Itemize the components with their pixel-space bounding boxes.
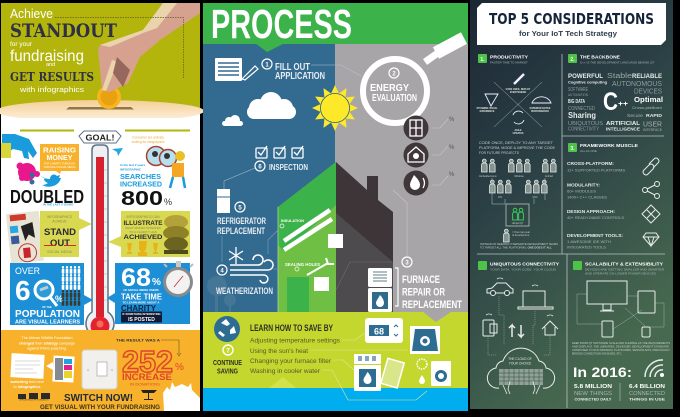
icons: social dots bbox=[30, 172, 34, 184]
step 6: inspection: INSPECTION bbox=[269, 163, 308, 172]
heading: achieve standout: fundraising bbox=[10, 48, 84, 65]
stat: 6.4 billion: THINGS IN USE bbox=[629, 398, 666, 402]
icon: small cloud bbox=[222, 115, 243, 126]
header pointer bbox=[255, 43, 285, 52]
section 3: framework muscle: 3. bbox=[570, 146, 575, 152]
sealing holes label and caulk gun: SEALING HOLES bbox=[285, 262, 320, 267]
icon: blue hand bbox=[1, 134, 37, 159]
panel: 60% visual learners: POPULATION bbox=[15, 309, 80, 320]
word cloud: Sharing bbox=[568, 111, 596, 120]
pictogram: developers by platform bbox=[479, 159, 558, 250]
heading: achieve standout: STANDOUT bbox=[10, 20, 117, 42]
stat: searches increased 800%: 800 bbox=[121, 188, 163, 210]
pictogram: developers by platform: of development bbox=[512, 234, 529, 237]
illustration: light switch bbox=[82, 350, 117, 389]
section 3: framework muscle: DEVELOPMENT TOOLS: bbox=[567, 233, 623, 238]
word cloud: UBIQUITOUS bbox=[568, 121, 603, 127]
section 3: framework muscle: ALL-IN-ONE bbox=[580, 149, 597, 153]
icon: cycle arrows bbox=[513, 111, 524, 124]
step 1: fill out application bbox=[215, 58, 325, 82]
icon: smartphone bbox=[602, 321, 613, 337]
paragraph: AND DISPLAYS, THE LIBRARIES, DESIGNER, DEVELOPMENT STANDARD bbox=[572, 344, 669, 348]
step 5: refrigerator replacement: REFRIGERATOR bbox=[217, 216, 266, 226]
section 3: framework muscle: INTEGRATED TOOLS bbox=[567, 246, 607, 250]
icon: window bbox=[404, 116, 428, 140]
header background bbox=[203, 3, 468, 44]
step 7: continue saving: 7 bbox=[226, 348, 230, 354]
stat: 5.8 million bbox=[574, 384, 612, 402]
step 7: continue saving: CONTINUE bbox=[213, 358, 242, 367]
section 5: scalability and extensibility: AND OPERATE ON LOWER POWER DEVICES bbox=[585, 272, 656, 276]
call to action: switch now: GET VISUAL WITH YOUR FUNDRAISING bbox=[40, 405, 160, 411]
heading: achieve standout: for your bbox=[10, 41, 33, 48]
caption: switching from text to infographics: to infographics bbox=[13, 385, 41, 389]
text: the result was: THE RESULT WAS A bbox=[116, 338, 160, 342]
goal sign: GOAL! bbox=[86, 132, 115, 142]
step 6: inspection: 6 bbox=[258, 164, 262, 170]
word cloud: RELIABLE bbox=[632, 73, 663, 80]
word cloud: Cross-platform bbox=[632, 105, 663, 110]
step 7: continue saving: SAVING bbox=[217, 366, 238, 376]
dark section of house bbox=[336, 162, 393, 312]
stat: doubled: IN THE LAST 3 YEARS bbox=[43, 202, 73, 206]
callout: stand out: STAND bbox=[44, 227, 77, 237]
illustration: person with binoculars bbox=[146, 146, 185, 188]
section 1: productivity: EXPERIENCE bbox=[480, 111, 495, 113]
icon: wifi signal bbox=[645, 360, 664, 377]
section 1: productivity: CODE ONCE, DEPLOY bbox=[506, 89, 531, 91]
title: PROCESS bbox=[211, 1, 352, 47]
pictogram: developers by platform: = One man year bbox=[512, 231, 530, 234]
word cloud: C bbox=[603, 88, 618, 116]
panel: 68% take time: OF SOCIAL MEDIA USERS bbox=[123, 288, 159, 292]
stat: 252% increase: % bbox=[175, 362, 184, 373]
text: code once deploy: FOR FUTURE PROJECTS bbox=[479, 151, 520, 155]
icon: thermostat bbox=[365, 318, 403, 343]
step 5: refrigerator replacement: REPLACEMENT bbox=[217, 226, 265, 236]
windows bbox=[314, 234, 343, 291]
icon: share nodes bbox=[642, 182, 660, 198]
stat: 6.4 billion: 6.4 BILLION bbox=[629, 384, 665, 390]
paragraph: DEEP FROM QT SOFTWARE SCALE AND FLEXIBLE AS THE REQUIREMENTS bbox=[572, 341, 670, 345]
icon: large cloud bbox=[247, 92, 296, 119]
panel: 60% visual learners: 6 bbox=[15, 275, 31, 306]
word cloud: POWERFUL bbox=[568, 73, 603, 80]
word cloud: DEVICES bbox=[634, 86, 662, 96]
step 1: fill out application: 1 bbox=[265, 62, 269, 68]
section 3: framework muscle: FRAMEWORK MUSCLE bbox=[580, 143, 638, 148]
stat: 252% increase: IN DONATIONS bbox=[130, 382, 161, 386]
panel: fundraising infographic bbox=[0, 3, 204, 411]
stat: 252% increase bbox=[122, 344, 184, 386]
callout: illustrate achieved bbox=[108, 211, 190, 257]
callout: stand out: OUT bbox=[50, 238, 71, 248]
section 3: framework muscle: 12+ SUPPORTED PLATFORMS bbox=[567, 168, 626, 172]
section 1: productivity: UPDATES bbox=[513, 132, 524, 135]
stat: searches increased 800%: INFOGRAPHIC bbox=[120, 168, 142, 172]
savings list: Changing your furnace filter bbox=[250, 359, 331, 365]
icon: thermostat: 68 bbox=[374, 326, 384, 336]
call to action: switch now: SWITCH NOW! bbox=[64, 392, 133, 404]
step 2: energy evaluation magnifier bbox=[363, 36, 464, 123]
stat: searches increased 800%: In the last 2 years bbox=[120, 163, 146, 167]
paragraph bbox=[572, 341, 670, 356]
bottom blue band bbox=[203, 388, 468, 411]
callout: raising money: THROUGH SOCIAL MEDIA bbox=[43, 165, 76, 169]
step 3: furnace repair or replacement: REPLACEMENT bbox=[402, 299, 462, 311]
sealing holes label and caulk gun bbox=[285, 258, 334, 275]
illustration: rhino bbox=[163, 382, 200, 411]
percent labels bbox=[432, 117, 455, 185]
icon: pink splat bbox=[16, 162, 40, 181]
panel: 60% visual learners bbox=[10, 263, 93, 326]
stat: 5.8 million: 5.8 MILLION bbox=[574, 384, 612, 390]
stat: 5.8 million: CONNECTED DAILY bbox=[574, 398, 612, 402]
section 1: productivity: FASTER TIME TO MARKET bbox=[490, 60, 528, 64]
icon: funnel bbox=[485, 94, 498, 106]
section 3: framework muscle: DESIGN APPROACH: bbox=[567, 209, 615, 214]
section 2: the backbone bbox=[568, 54, 654, 64]
text: African Wildlife Foundation: against Rhino poaching, bbox=[27, 346, 67, 350]
icon: tape measure bbox=[163, 215, 189, 254]
caption: elephants: AFRICAN WILDLIFE FOUNDATION bbox=[20, 398, 49, 402]
connector bbox=[336, 262, 392, 290]
section 1: productivity: PERFORMANCE bbox=[531, 110, 549, 113]
savings list: Using the sun's heat bbox=[250, 349, 308, 355]
icon: paper plane bbox=[112, 148, 123, 156]
illustration: hand dropping coin bbox=[98, 3, 200, 92]
step 4: weatherization bbox=[216, 247, 273, 296]
decorative goal lines bbox=[20, 130, 190, 132]
connector bbox=[393, 190, 407, 256]
panel: 68% take time: IS POSTED bbox=[128, 317, 155, 323]
callout: stand out: ACHIEVE bbox=[52, 220, 68, 224]
icon: water and flame bbox=[404, 170, 428, 196]
word cloud: CONNECTED bbox=[568, 106, 595, 112]
callout: raising money: MONEY bbox=[46, 153, 72, 162]
stat: searches increased 800% bbox=[120, 163, 172, 210]
icon: magic wand bbox=[514, 74, 524, 84]
icon: house recycle bbox=[404, 142, 428, 168]
icon: furnace bbox=[354, 354, 381, 391]
step 3: furnace repair or replacement: FURNACE bbox=[402, 274, 440, 286]
panel: 68% take time: IF SOMETHING INTERESTING bbox=[122, 312, 161, 316]
panel: 60% visual learners: OF THE bbox=[42, 305, 52, 309]
connectors bbox=[222, 230, 284, 269]
word cloud: INTELLIGENCE bbox=[606, 126, 640, 132]
text: code once deploy: CODE ONCE, DEPLOY TO ANY TARGET bbox=[479, 141, 553, 145]
savings list: Washing in cooler water bbox=[250, 369, 320, 375]
stat: 252% increase: 252 bbox=[122, 344, 173, 379]
section 3: framework muscle: 1 AWESOME IDE WITH bbox=[567, 240, 612, 244]
step 1: fill out application: FILL OUT bbox=[275, 62, 310, 73]
pictogram: developers by platform: INSTEAD OF NEEDING 5 SEPARATE DEVELOPMENT TEAMS bbox=[480, 242, 558, 246]
word cloud: CONNECTIVITY bbox=[568, 126, 600, 132]
collection plate bbox=[0, 100, 204, 126]
callout: raising money: RAISING bbox=[43, 146, 76, 154]
word cloud: BIG DATA bbox=[568, 99, 585, 105]
callout: illustrate achieved: ACHIEVED bbox=[124, 234, 163, 241]
section 1: productivity bbox=[476, 54, 551, 135]
dividers bbox=[477, 54, 665, 408]
heading: achieve standout: GET RESULTS bbox=[10, 69, 94, 84]
icons: trophies bbox=[127, 241, 158, 256]
text: code once deploy: PLATFORM, MODE & IMPROVE THE CODE bbox=[479, 146, 556, 150]
stat: 6.4 billion: CONNECTED bbox=[629, 391, 665, 397]
text: African Wildlife Foundation: The African Wildlife Foundation bbox=[21, 336, 73, 340]
icon: monitor bbox=[587, 281, 627, 311]
icon: puzzle diamond bbox=[642, 205, 660, 223]
section 3: framework muscle: 1400+ C++ CLASSES bbox=[567, 196, 608, 200]
section 5: scalability and extensibility: DEVICES ARE GETTING SMALLER AND SMARTER bbox=[585, 268, 665, 272]
panel: 60% visual learners: ARE VISUAL LEARNERS bbox=[15, 320, 80, 326]
word cloud: ++ bbox=[618, 101, 628, 108]
step 7: continue saving bbox=[213, 316, 242, 376]
icon: air vent bbox=[410, 326, 440, 354]
section 1: productivity: PRODUCTIVITY bbox=[490, 54, 528, 60]
stat: searches increased 800%: % bbox=[164, 197, 172, 207]
icon: car bbox=[487, 278, 513, 296]
stat: 6.4 billion bbox=[629, 384, 666, 402]
goal sign bbox=[79, 131, 121, 143]
icon: cloud with keyboard bbox=[487, 348, 555, 394]
heading: achieve standout: with infographics bbox=[19, 85, 84, 94]
step 2: energy evaluation magnifier: ENERGY bbox=[370, 83, 409, 94]
icon: sun bbox=[312, 85, 358, 131]
dotted arrow bbox=[55, 18, 184, 79]
call to action: switch now bbox=[40, 392, 160, 411]
word cloud: USER bbox=[643, 122, 662, 128]
connector bbox=[311, 65, 361, 76]
section 3: framework muscle: 40+ READY-MADE CONTROLS bbox=[567, 216, 625, 220]
section 4: ubiquitous connectivity bbox=[478, 261, 559, 394]
section 2: the backbone: 2. bbox=[570, 57, 575, 63]
section 5: scalability and extensibility bbox=[572, 261, 670, 402]
icon: gem bbox=[643, 233, 659, 246]
pictogram: developers by platform: Ubiquiti QT bbox=[512, 222, 524, 225]
text: African Wildlife Foundation: changed their strategy campaign bbox=[19, 342, 75, 346]
right grey section bbox=[335, 44, 468, 312]
section 1: productivity: 1. bbox=[480, 57, 485, 63]
icon: stopwatch bbox=[163, 261, 193, 297]
step 4: weatherization: 4 bbox=[220, 268, 224, 274]
stat: doubled: DOUBLED bbox=[10, 187, 84, 207]
step 1: fill out application: APPLICATION bbox=[275, 71, 325, 82]
word cloud: AUTOMATION bbox=[568, 92, 588, 97]
pictogram: developers by platform: Windows bbox=[514, 176, 525, 178]
insulation strips: INSULATION bbox=[281, 219, 304, 223]
step 2: energy evaluation magnifier: 2 bbox=[392, 72, 396, 78]
title box: for Your IoT Tech Strategy bbox=[519, 29, 618, 38]
image: text document to infographic bbox=[10, 353, 75, 383]
heading: achieve standout: and bbox=[46, 62, 55, 68]
step 3: furnace repair or replacement: 3 bbox=[405, 260, 409, 266]
section 4: ubiquitous connectivity: UNIQUITOUS CONNECTIVITY bbox=[490, 262, 559, 266]
icon: watch bbox=[642, 327, 650, 337]
word cloud: SOFTWARE bbox=[568, 87, 588, 93]
divider bbox=[619, 383, 621, 401]
stat: searches increased 800%: SEARCHES bbox=[120, 172, 161, 181]
word cloud: RAPID bbox=[646, 113, 663, 118]
step 4: weatherization: WEATHERIZATION bbox=[216, 286, 273, 296]
illustration: social card bbox=[5, 210, 45, 265]
panel: process infographic bbox=[203, 1, 468, 411]
lime pointer bbox=[269, 377, 296, 388]
insulation strips bbox=[280, 210, 332, 250]
icon: gauge bbox=[532, 97, 551, 103]
stat heading: in 2016: In 2016: bbox=[573, 364, 632, 380]
note: consumers looking for infographics bbox=[132, 136, 165, 144]
caption: switching from text to infographics bbox=[10, 380, 45, 389]
caption: switching from text to infographics: switching from text bbox=[10, 380, 45, 384]
callout: illustrate achieved: WHAT MONEY DONATED bbox=[125, 226, 162, 230]
percent labels: % bbox=[449, 145, 455, 151]
panel: 68% take time: CHARITY bbox=[121, 304, 157, 313]
text: code once deploy bbox=[479, 141, 556, 155]
step 3: furnace repair or replacement bbox=[368, 257, 462, 312]
savings list: LEARN HOW TO SAVE BY bbox=[250, 323, 333, 334]
icons: elephants bbox=[18, 393, 50, 399]
paragraph: BRIDGED CONNECTIONS AND BUSES, ETC. bbox=[572, 352, 622, 356]
pictogram: developers by platform: TO TARGET ALL THE PLATFORMS, ONE DOES IT ALL bbox=[480, 246, 552, 250]
icon: cloud with keyboard: YOUR CHOICE bbox=[509, 362, 531, 366]
heading: achieve standout: Achieve bbox=[10, 7, 53, 21]
heading: achieve standout bbox=[10, 7, 117, 94]
section 3: framework muscle: CROSS-PLATFORM: bbox=[567, 161, 614, 166]
step 2: energy evaluation magnifier: EVALUATION bbox=[372, 93, 417, 104]
panel: 60% visual learners: OVER bbox=[15, 266, 40, 277]
word cloud: ARTIFICIAL bbox=[606, 121, 641, 127]
stat: 252% increase: INCREASE bbox=[122, 372, 172, 382]
word cloud: Optimal bbox=[634, 95, 663, 104]
icon: house bbox=[542, 315, 558, 335]
paragraph: COMPOSED TO RUN MINIMUM, PLATFORMS, SENSOR APIS, PREVIOUSLY bbox=[572, 348, 670, 352]
panel: IoT considerations bbox=[470, 0, 673, 409]
section 2: the backbone: THE BACKBONE bbox=[580, 54, 620, 60]
callout: illustrate achieved: INFOGRAPHICS CAN bbox=[127, 215, 160, 219]
pictogram: developers by platform: QNX bbox=[533, 197, 538, 199]
callout: illustrate achieved: ILLUSTRATE bbox=[124, 220, 162, 227]
section 1: productivity: STUNNING VISUAL bbox=[476, 107, 498, 110]
lime savings band bbox=[203, 312, 468, 388]
section 3: framework muscle: MODULARITY: bbox=[567, 182, 600, 188]
icon: acacia tree bbox=[141, 390, 157, 400]
callout: stand out: SOCIAL MEDIA bbox=[47, 250, 73, 254]
callout: raising money: FOR CHARITY THROUGH bbox=[44, 162, 75, 166]
panel: orange results band bbox=[1, 330, 200, 411]
callout: illustrate achieved: TO A CHARITY HAS bbox=[129, 230, 157, 234]
panel: 68% take time: 68 bbox=[121, 264, 151, 292]
stat: 5.8 million: NEW THINGS bbox=[574, 391, 612, 397]
callout: raising money bbox=[40, 144, 79, 174]
step 6: inspection bbox=[255, 146, 308, 172]
pictogram: developers by platform: Android bbox=[545, 175, 554, 178]
icon: furnace filter bbox=[381, 358, 404, 388]
connectors bbox=[310, 333, 427, 400]
stat: searches increased 800%: INCREASED bbox=[120, 180, 163, 188]
thermometer bbox=[86, 145, 114, 337]
icon: laptop bbox=[518, 285, 553, 309]
pictogram: developers by platform: iOS bbox=[498, 197, 502, 199]
savings list: Adjusting temperature settings bbox=[250, 338, 340, 344]
note: consumers looking for infographics: looking for infographics bbox=[132, 140, 165, 144]
callout: stand out bbox=[40, 211, 92, 257]
percent labels: % bbox=[449, 172, 455, 178]
word cloud: Cognitive computing bbox=[568, 80, 608, 84]
icon: chain link bbox=[643, 158, 659, 175]
pictogram: people bbox=[62, 266, 80, 306]
word cloud: INTERFACE bbox=[643, 128, 663, 132]
section 1: productivity: AGILE bbox=[514, 129, 522, 132]
word cloud: AUTONOMOUS bbox=[612, 79, 662, 88]
section 3: framework muscle bbox=[567, 143, 660, 250]
icon: twitter bird bbox=[41, 175, 61, 187]
callout: stand out: INFOGRAPHICS bbox=[47, 215, 73, 219]
icon: coin bbox=[97, 85, 121, 109]
icon: washer with drop and sun bbox=[417, 359, 451, 386]
section 5: scalability and extensibility: SCALABILITY & EXTENSIBILITY bbox=[585, 262, 663, 266]
percent labels: % bbox=[449, 117, 455, 123]
panel: 68% take time bbox=[107, 263, 190, 324]
title box bbox=[477, 3, 666, 45]
dotted arrow bbox=[161, 340, 181, 356]
icon: cloud with keyboard: THE CLOUD OF bbox=[508, 357, 532, 361]
panel: 60% visual learners: % bbox=[55, 294, 63, 304]
icon: phone bbox=[483, 314, 497, 336]
section 3: framework muscle: 60+ MODULES bbox=[567, 190, 597, 194]
text: African Wildlife Foundation bbox=[19, 336, 75, 350]
panel: 68% take time: % bbox=[152, 277, 161, 288]
panel: 68% take time: TO LEARN MORE ABOUT A bbox=[123, 300, 159, 304]
left blue section bbox=[203, 44, 335, 312]
grey pointer bbox=[423, 312, 451, 322]
step 5: refrigerator replacement bbox=[217, 189, 266, 236]
header background bbox=[1, 3, 200, 111]
green wing of house bbox=[278, 162, 336, 312]
icon: tablet bbox=[638, 291, 655, 313]
word cloud: Secure bbox=[627, 113, 644, 118]
word cloud bbox=[568, 73, 663, 132]
connector bbox=[224, 168, 255, 189]
section 4: ubiquitous connectivity: YOUR DATA. YOUR CODE. YOUR CLOUD bbox=[490, 268, 557, 272]
section 2: the backbone: C++ IS THE DEVELOPMENT LANGUAGE BEHIND QT bbox=[580, 60, 654, 64]
savings list bbox=[250, 323, 340, 375]
panel: 68% take time: TAKE TIME bbox=[121, 292, 162, 302]
section 1: productivity: EVERYWHERE bbox=[510, 92, 527, 94]
word cloud: Stable bbox=[607, 73, 632, 80]
step 5: refrigerator replacement: 5 bbox=[238, 206, 242, 212]
pictogram: developers by platform: Embedded Linux bbox=[479, 176, 497, 178]
step 3: furnace repair or replacement: REPAIR OR bbox=[402, 286, 445, 298]
icon: sync arrows bbox=[509, 325, 524, 337]
note: consumers looking for infographics: Consumer are actively bbox=[132, 136, 164, 140]
section 1: productivity: SUPERIOR NATIVE bbox=[530, 107, 551, 110]
faded trees bbox=[207, 276, 236, 312]
